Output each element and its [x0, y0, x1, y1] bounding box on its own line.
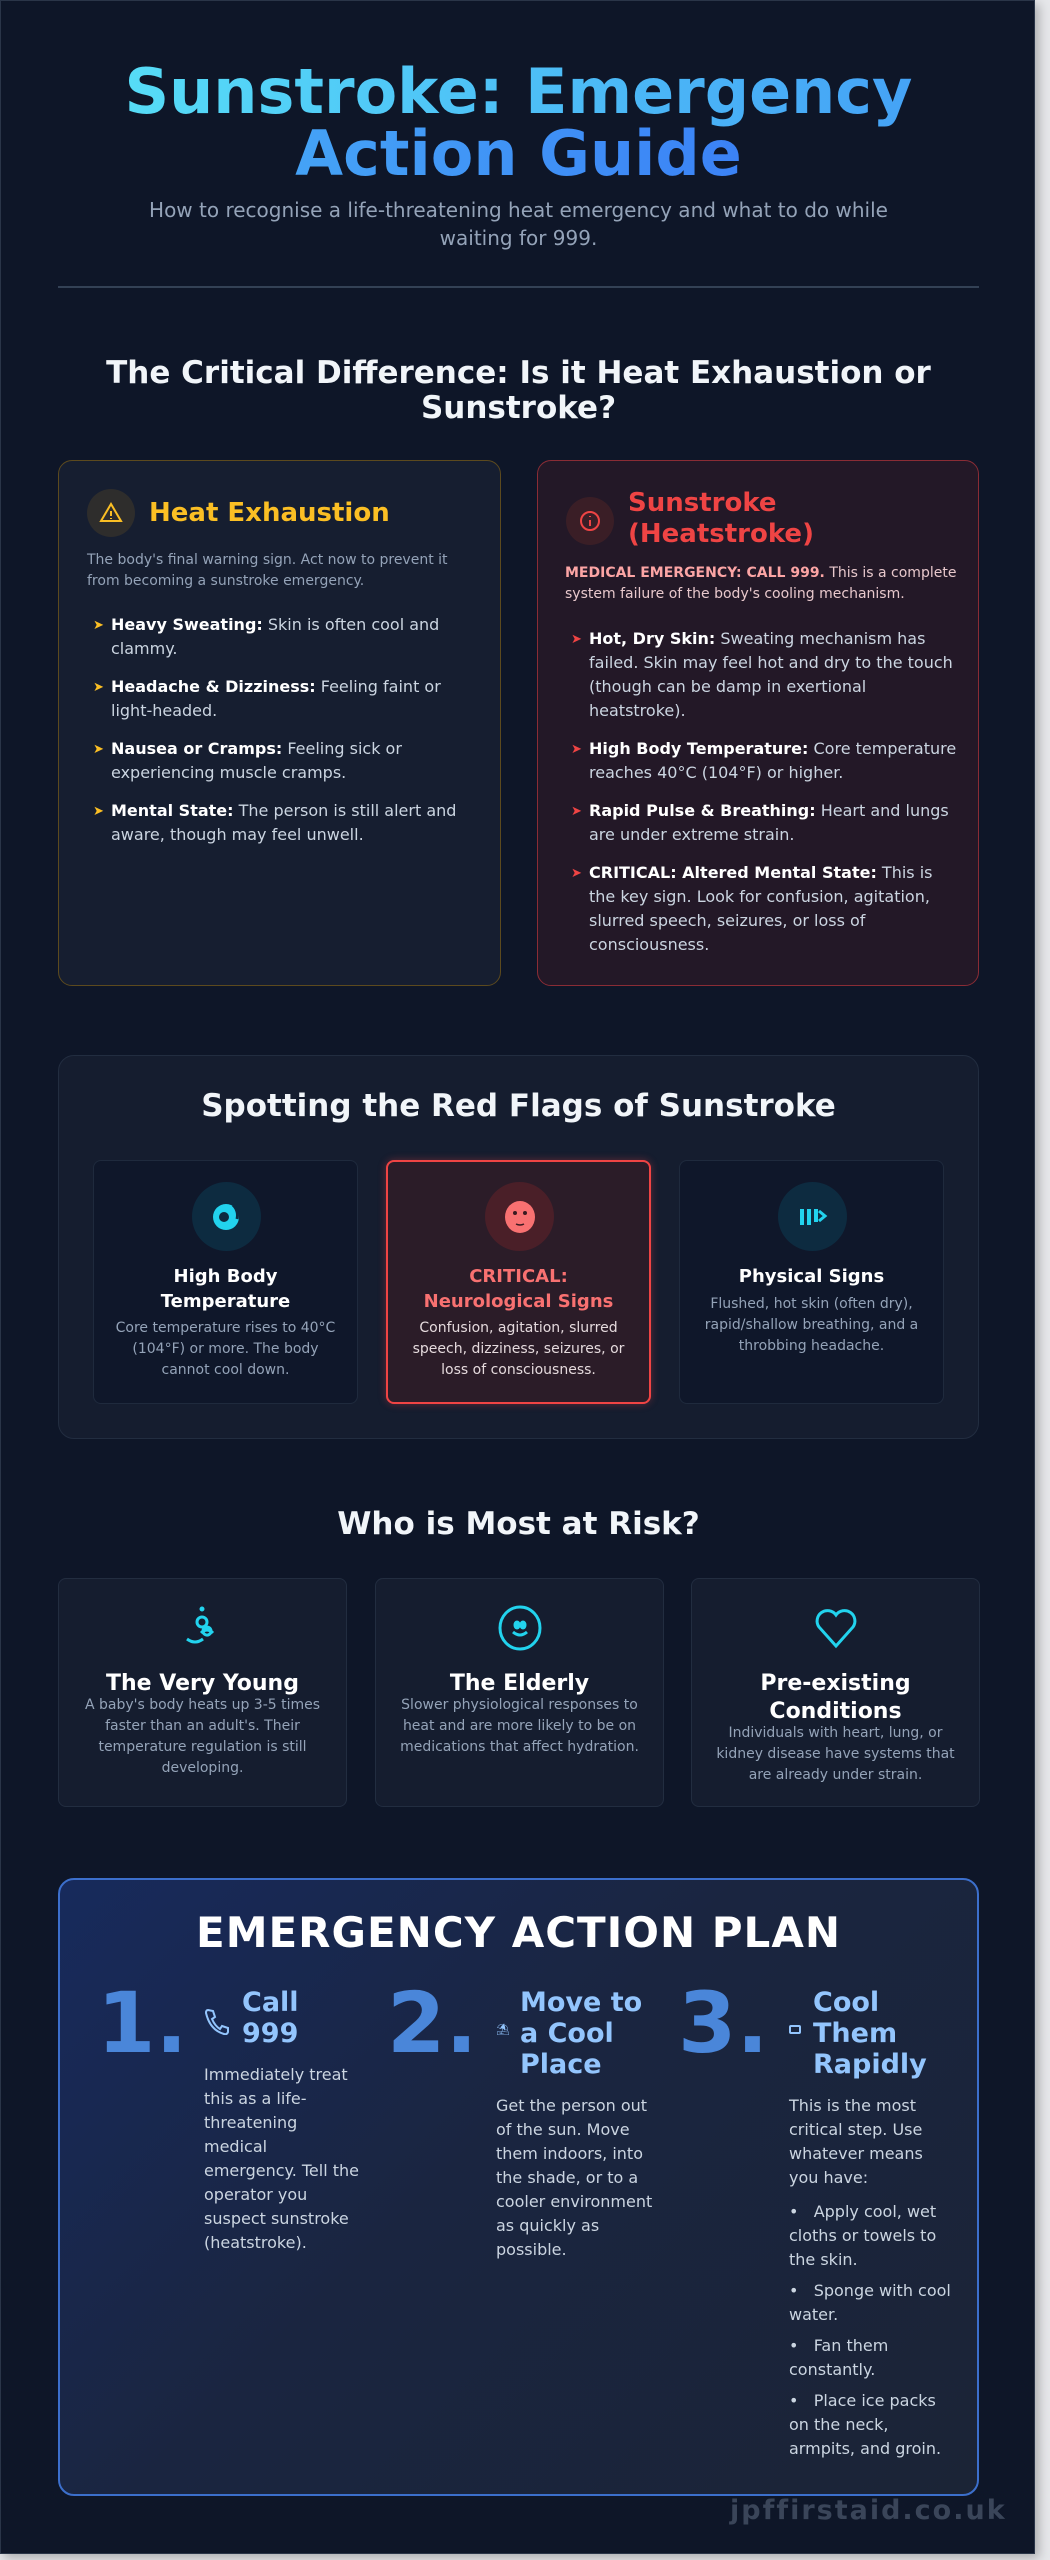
list: symptoms: are under extreme strain. — [589, 825, 794, 844]
icon: baby — [186, 1606, 214, 1644]
icon: physical — [778, 1182, 847, 1251]
card: physical signs — [679, 1160, 944, 1404]
card: physical signs: Flushed, hot skin (often dry), rapid/shallow breathing, and a throbbing headache. — [705, 1296, 918, 1354]
heading: sunstroke — [628, 488, 814, 549]
heading: emergency action plan: EMERGENCY ACTION PLAN — [196, 1908, 841, 1957]
icon: thermometer gauge — [192, 1182, 261, 1251]
card: elderly — [375, 1578, 664, 1807]
heading: critical difference: The Critical Difference: Is it Heat Exhaustion or — [106, 355, 931, 391]
icon: warning — [87, 489, 135, 537]
panel: heat exhaustion: ➤ — [93, 618, 104, 633]
step 2: move to cool place — [496, 1987, 652, 2259]
icon: face — [498, 1606, 542, 1650]
list: symptoms: High Body Temperature: Core temperature — [589, 739, 956, 758]
card: high body temperature — [93, 1160, 358, 1404]
heading: sunstroke: Sunstroke — [628, 488, 777, 518]
heading: sunstroke: (Heatstroke) — [628, 519, 814, 549]
card: neurological signs — [386, 1160, 651, 1404]
step 3: cool rapidly: • Sponge with cool water. — [789, 2281, 951, 2324]
card: very young — [58, 1578, 347, 1807]
step 1 number: 1. — [97, 1974, 187, 2072]
title: Action Guide — [295, 117, 742, 190]
step 3: cool rapidly: Them — [813, 2018, 897, 2049]
list: symptoms: Mental State: The person is still alert and aware, though may feel unwell. — [111, 801, 456, 844]
step 2: move to cool place: a Cool — [520, 2018, 614, 2049]
step 2: move to cool place: Get the person out of the sun. Move them indoors, into the shade, or to a cooler environment as quickly as possible. — [496, 2096, 652, 2259]
card: elderly: The Elderly — [450, 1671, 589, 1696]
card: pre-existing — [691, 1578, 980, 1807]
card: pre-existing: Pre-existing — [760, 1671, 911, 1696]
list: symptoms: Heavy Sweating: Skin is often cool and clammy. — [111, 615, 439, 658]
watermark: jpffirstaid.co.uk — [730, 2495, 1007, 2526]
list: symptoms: Nausea or Cramps: Feeling sick or experiencing muscle cramps. — [111, 739, 402, 782]
card: high body temperature: Core temperature rises to 40°C (104°F) or more. The body cannot cool down. — [116, 1320, 335, 1378]
panel: red flags — [58, 1055, 979, 1439]
icon: heart — [816, 1609, 856, 1648]
list: symptoms — [571, 629, 956, 954]
panel: heat exhaustion — [58, 460, 501, 986]
step 2: move to cool place: Place — [520, 2049, 602, 2080]
heading: who is at risk: Who is Most at Risk? — [337, 1506, 700, 1542]
list: symptoms — [93, 615, 456, 844]
list: symptoms: Headache & Dizziness: Feeling faint or light-headed. — [111, 677, 441, 720]
step 2 number: 2. — [387, 1974, 477, 2072]
card: high body temperature: Temperature — [161, 1291, 290, 1312]
panel: sunstroke: ➤ — [571, 804, 582, 819]
list: symptoms: slurred speech, seizures, or loss of — [589, 911, 865, 930]
icon: shade: ⛱ — [496, 2023, 510, 2036]
card: physical signs: Physical Signs — [739, 1266, 884, 1287]
heading: heat exhaustion: Heat Exhaustion — [149, 498, 390, 528]
card: pre-existing: Conditions — [769, 1699, 902, 1724]
step 1: call 999: Immediately treat this as a life-threatening medical emergency. Tell the operator you suspect sunstroke (heatstroke). — [204, 2065, 359, 2252]
heading: critical difference — [106, 355, 931, 426]
title: Sunstroke: Emergency — [125, 55, 912, 128]
step 3: cool rapidly: • Fan them constantly. — [789, 2336, 888, 2379]
panel: sunstroke: ➤ — [571, 632, 582, 647]
icon: towel — [789, 2025, 801, 2034]
icon: info — [566, 497, 614, 545]
step 2: move to cool place: Move to — [520, 1987, 642, 2018]
step 3: cool rapidly — [788, 1987, 951, 2458]
step 1: call 999: 999 — [242, 2018, 298, 2049]
list: symptoms: Hot, Dry Skin: Sweating mechanism has — [589, 629, 925, 648]
card: neurological signs: CRITICAL: — [469, 1266, 568, 1287]
icon: face — [485, 1182, 554, 1251]
card: neurological signs: Confusion, agitation, slurred speech, dizziness, seizures, or loss of consciousness. — [413, 1320, 624, 1378]
list: symptoms: Rapid Pulse & Breathing: Heart and lungs — [589, 801, 949, 820]
step 3 number: 3. — [678, 1974, 768, 2072]
list: symptoms: reaches 40°C (104°F) or higher. — [589, 763, 843, 782]
card: neurological signs: Neurological Signs — [424, 1291, 613, 1312]
panel: heat exhaustion: ➤ — [93, 742, 104, 757]
heading: critical difference: Sunstroke? — [421, 390, 616, 426]
step 3: cool rapidly: Cool — [813, 1987, 879, 2018]
list: symptoms: CRITICAL: Altered Mental State: This is — [589, 863, 932, 882]
panel: emergency action plan — [58, 1878, 979, 2496]
step 3: cool rapidly: Rapidly — [813, 2049, 927, 2080]
step 3: cool rapidly: • Place ice packs on the neck, armpits, and groin. — [789, 2391, 941, 2458]
panel: heat exhaustion: ➤ — [93, 804, 104, 819]
list: symptoms: heatstroke). — [589, 701, 686, 720]
heading: red flags: Spotting the Red Flags of Sunstroke — [201, 1088, 836, 1124]
list: symptoms: consciousness. — [589, 935, 709, 954]
title — [125, 55, 912, 190]
list: symptoms: failed. Skin may feel hot and dry to the touch — [589, 653, 953, 672]
step 3: cool rapidly: This is the most critical step. Use whatever means you have: — [789, 2096, 923, 2187]
text: emergency note: MEDICAL EMERGENCY: CALL 999. This is a complete system failure of the body's cooling mechanism. — [565, 565, 956, 602]
card: pre-existing: Individuals with heart, lung, or kidney disease have systems that are already under strain. — [716, 1725, 955, 1783]
card: very young: The Very Young — [106, 1671, 299, 1696]
subtitle: How to recognise a life-threatening heat emergency and what to do while waiting for 999. — [149, 198, 888, 250]
panel: sunstroke: ➤ — [571, 866, 582, 881]
step 1: call 999: Call — [242, 1987, 299, 2018]
card: elderly: Slower physiological responses to heat and are more likely to be on medications that affect hydration. — [400, 1697, 639, 1755]
list: symptoms: the key sign. Look for confusion, agitation, — [589, 887, 930, 906]
panel: sunstroke — [537, 460, 979, 986]
card: high body temperature: High Body — [174, 1266, 277, 1287]
panel: heat exhaustion: ➤ — [93, 680, 104, 695]
card: very young: A baby's body heats up 3-5 times faster than an adult's. Their temperature regulation is still developing. — [85, 1697, 320, 1776]
panel: sunstroke: ➤ — [571, 742, 582, 757]
step 3: cool rapidly: • Apply cool, wet cloths or towels to the skin. — [789, 2202, 936, 2269]
list: symptoms: (though can be damp in exertional — [589, 677, 866, 696]
text: description: The body's final warning sign. Act now to prevent it from becoming a sunstroke emergency. — [87, 552, 448, 589]
icon: phone — [205, 2009, 229, 2035]
